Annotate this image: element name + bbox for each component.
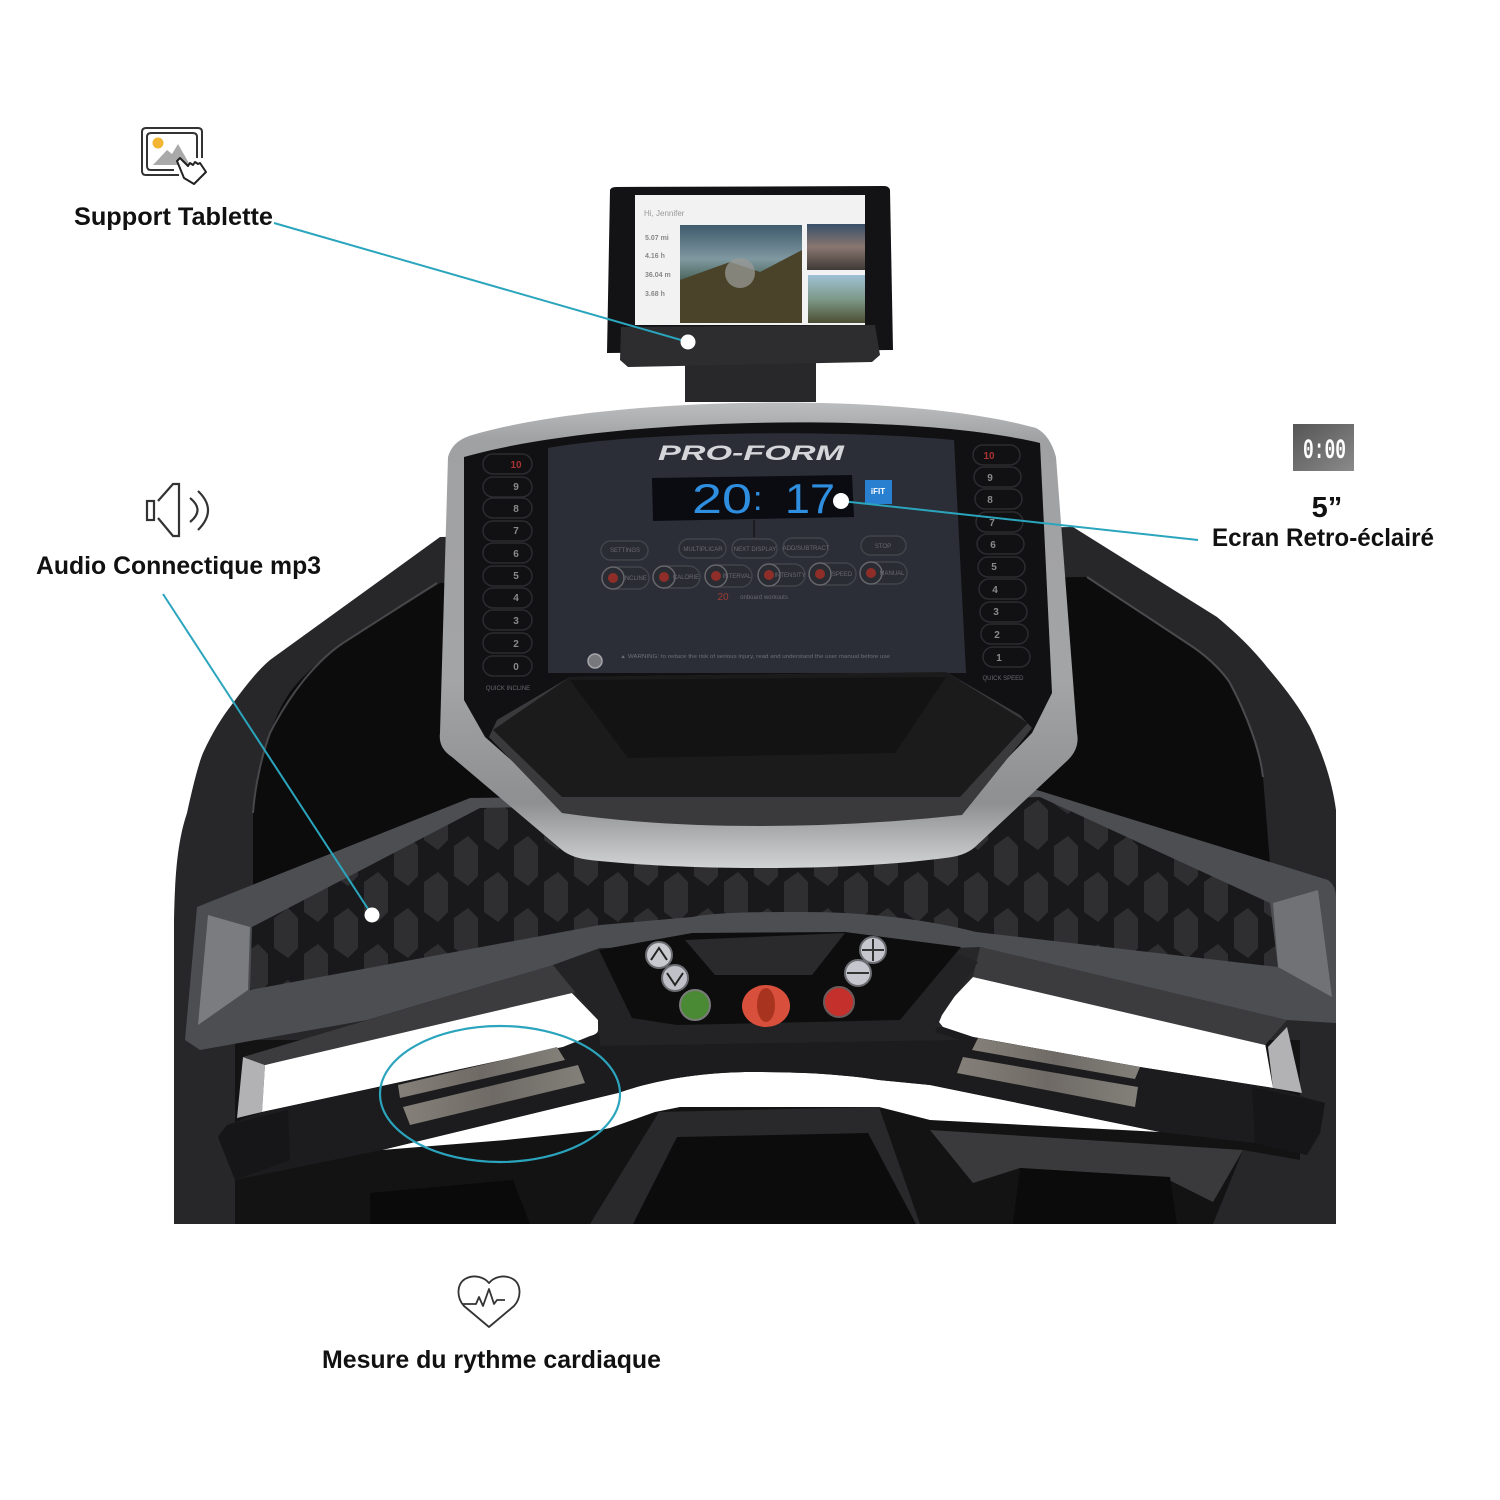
left keypad: 6 bbox=[513, 549, 519, 560]
iFit tile: iFIT bbox=[871, 487, 885, 496]
function buttons: MULTIPLICAR bbox=[683, 547, 723, 553]
tray bbox=[489, 672, 1032, 826]
leader line bbox=[163, 594, 372, 915]
right keypad: 10 bbox=[983, 451, 995, 462]
right keypad: 9 bbox=[987, 473, 993, 484]
time display: 17 bbox=[785, 475, 835, 522]
icon: timer display bbox=[1293, 424, 1354, 471]
right keypad: 1 bbox=[996, 653, 1002, 664]
stats list: 36.04 m bbox=[645, 272, 671, 279]
usb port bbox=[588, 654, 602, 668]
function buttons: STOP bbox=[875, 544, 891, 550]
stats list: 5.07 mi bbox=[645, 235, 669, 242]
callout: support tablette bbox=[274, 223, 696, 350]
centre console bbox=[553, 932, 978, 1046]
workout buttons: INTERVAL bbox=[723, 574, 752, 580]
right keypad: 8 bbox=[987, 495, 993, 506]
left keypad: 9 bbox=[513, 482, 519, 493]
function buttons: NEXT DISPLAY bbox=[734, 547, 776, 553]
callout: audio bbox=[163, 594, 380, 922]
iFit tile bbox=[865, 480, 892, 504]
screen title: Hi, Jennifer bbox=[644, 209, 685, 218]
icon: heart rate bbox=[458, 1276, 520, 1327]
left keypad: 2 bbox=[513, 639, 519, 650]
workout buttons: INCLINE bbox=[623, 576, 647, 582]
workout buttons: MANUAL bbox=[879, 571, 905, 577]
time display: : bbox=[753, 480, 762, 518]
icon: speaker bbox=[147, 484, 208, 536]
dot bbox=[680, 334, 696, 350]
right keypad: 3 bbox=[993, 607, 999, 618]
workouts caption: 20 bbox=[717, 592, 729, 603]
stats list: 4.16 h bbox=[645, 253, 665, 260]
workout buttons bbox=[602, 562, 907, 589]
label: audio: Audio Connectique mp3 bbox=[36, 552, 321, 580]
workouts caption: onboard workouts bbox=[740, 595, 788, 601]
white gaps between bars bbox=[262, 977, 1273, 1150]
stem bbox=[685, 360, 816, 402]
lower shroud bbox=[370, 1107, 1300, 1224]
leader line bbox=[841, 501, 1198, 540]
left keypad: 7 bbox=[513, 526, 519, 537]
label: screen size: 5” bbox=[1312, 492, 1342, 524]
grips left bbox=[398, 1047, 585, 1125]
left keypad: 5 bbox=[513, 571, 519, 582]
tablet holder bbox=[607, 186, 893, 402]
dot bbox=[833, 493, 849, 509]
right keypad: 6 bbox=[990, 540, 996, 551]
time display: 20 bbox=[692, 475, 752, 522]
body highlight right bbox=[1087, 577, 1263, 777]
function buttons bbox=[601, 520, 906, 560]
time display bbox=[652, 475, 854, 522]
icon: timer display: 0:00 bbox=[1303, 436, 1346, 467]
body highlight left bbox=[253, 583, 437, 813]
logo: PRO-FORM bbox=[658, 442, 845, 465]
main photo bbox=[680, 225, 802, 323]
left keypad: 3 bbox=[513, 616, 519, 627]
underside bands bbox=[243, 963, 585, 1065]
grey side columns bbox=[237, 1027, 1302, 1118]
slate screen panel bbox=[548, 433, 966, 673]
workout buttons: CALORIE bbox=[673, 575, 699, 581]
function buttons: SETTINGS bbox=[610, 548, 640, 554]
left keypad: QUICK INCLINE bbox=[486, 686, 530, 692]
handlebar bbox=[218, 1027, 1325, 1180]
icon: tablet touch bbox=[142, 128, 206, 184]
stats list bbox=[645, 235, 671, 298]
label: ecran: Ecran Retro-éclairé bbox=[1212, 524, 1434, 552]
inner opening bbox=[253, 577, 1273, 900]
right keypad bbox=[973, 445, 1030, 682]
right keypad: QUICK SPEED bbox=[982, 676, 1024, 682]
callout: ecran bbox=[833, 493, 1198, 540]
grips right bbox=[957, 1038, 1140, 1107]
right keypad: 4 bbox=[992, 585, 998, 596]
treadmill photo bbox=[174, 527, 1336, 1224]
left keypad: 10 bbox=[510, 460, 522, 471]
left keypad bbox=[483, 454, 532, 692]
workouts caption bbox=[717, 592, 788, 603]
right keypad: 5 bbox=[991, 562, 997, 573]
left keypad: 0 bbox=[513, 662, 519, 673]
workout buttons: INTENSITY bbox=[774, 573, 806, 579]
stats list: 3.68 h bbox=[645, 291, 665, 298]
handlebar ends bbox=[218, 1087, 1325, 1180]
workout buttons: SPEED bbox=[832, 572, 853, 578]
control buttons bbox=[646, 937, 886, 1027]
black inner panel bbox=[464, 422, 1052, 805]
left keypad: 4 bbox=[513, 593, 519, 604]
callout: heart rate ellipse bbox=[380, 1026, 620, 1162]
leader line bbox=[274, 223, 688, 342]
right keypad: 7 bbox=[989, 518, 995, 529]
speaker panel bbox=[250, 797, 1278, 990]
dot bbox=[364, 908, 380, 922]
tablet body bbox=[607, 186, 893, 353]
lower shroud base bbox=[235, 1040, 1300, 1224]
console head bbox=[440, 403, 1078, 868]
cradle bbox=[620, 325, 880, 367]
label: rythme cardiaque: Mesure du rythme cardiaque bbox=[322, 1346, 661, 1374]
silver bezel bbox=[440, 403, 1078, 868]
right keypad: 2 bbox=[994, 630, 1000, 641]
warning text: ▲ WARNING: to reduce the risk of serious injury, read and understand the user manual before use bbox=[620, 654, 890, 660]
left keypad: 8 bbox=[513, 504, 519, 515]
speaker frame bbox=[185, 790, 1336, 1065]
handlebar frame body bbox=[174, 527, 1336, 1224]
label: support tablette: Support Tablette bbox=[74, 203, 273, 231]
function buttons: ADD/SUBTRACT bbox=[783, 546, 830, 552]
tablet screen bbox=[635, 195, 865, 325]
corner facets bbox=[198, 915, 250, 1025]
